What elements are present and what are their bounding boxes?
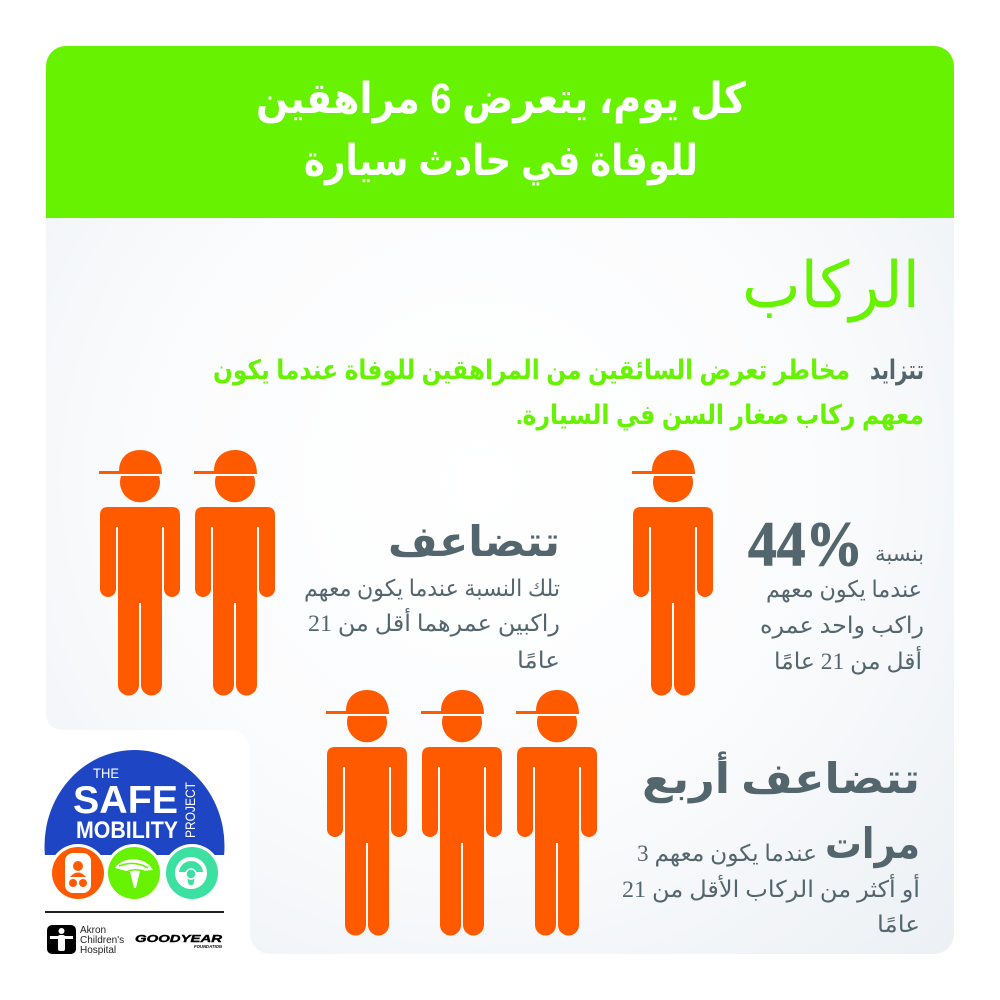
quadruples line 1: عندما يكون معهم 3	[637, 841, 817, 867]
logo: Akron Children's Hospital: Akron	[80, 925, 106, 936]
doubles heading: تتضاعف	[388, 520, 560, 566]
stat line 3: أقل من 21 عامًا	[774, 646, 922, 675]
doubles line 1: تلك النسبة عندما يكون معهم	[304, 576, 560, 602]
panel: main background	[46, 218, 954, 954]
logo text: PROJECT	[182, 782, 198, 838]
icon: helmet	[105, 844, 163, 902]
quadruples heading line 2: مرات	[825, 822, 920, 869]
logo dome	[44, 750, 224, 855]
doubles line 2: راكبين عمرهما أقل من 21	[308, 608, 560, 637]
logo text: MOBILITY	[76, 817, 178, 844]
stat: doubles	[304, 520, 560, 673]
stat line 2: راكب واحد عمره	[760, 613, 924, 639]
stat line 1: عندما يكون معهم	[766, 577, 922, 603]
logo: Akron Children's Hospital: Hospital	[80, 945, 116, 956]
icon: steering wheel	[163, 844, 221, 902]
stat value: 44%	[748, 508, 863, 579]
quadruples line 3: عامًا	[877, 912, 920, 937]
intro text	[213, 355, 924, 431]
intro line 1 dark word: تتزايد	[870, 355, 924, 386]
logo: Akron Children's Hospital	[47, 925, 124, 956]
logo text: SAFE	[73, 779, 178, 822]
figures: two passengers	[99, 450, 275, 696]
intro line 1 green: مخاطر تعرض السائقين من المراهقين للوفاة عندما يكون	[213, 355, 850, 386]
figure: one passenger	[632, 450, 713, 696]
logo: Safe Mobility Project	[44, 750, 224, 956]
stat: 44 percent	[748, 508, 924, 675]
title line 1: كل يوم، يتعرض 6 مراهقين	[256, 75, 746, 124]
intro line 2: معهم ركاب صغار السن في السيارة.	[516, 400, 924, 431]
logo text	[73, 765, 198, 844]
stat: quadruples	[622, 751, 920, 937]
stat prefix: بنسبة	[875, 541, 924, 566]
title line 2: للوفاة في حادث سيارة	[304, 137, 698, 186]
header banner	[46, 46, 954, 218]
quadruples line 2: أو أكثر من الركاب الأقل من 21	[622, 874, 920, 903]
logo: Goodyear Foundation: FOUNDATION	[194, 944, 223, 949]
heading: passengers: الركاب	[742, 249, 920, 323]
logo: Akron Children's Hospital: Children's	[80, 935, 124, 946]
logo divider	[45, 911, 224, 913]
logo: Goodyear Foundation	[135, 934, 223, 949]
logo: Goodyear Foundation: GOODYEAR	[135, 934, 223, 945]
icon: child seat	[49, 844, 107, 902]
logo text: THE	[93, 765, 119, 781]
quadruples heading line 1: تتضاعف أربع	[642, 751, 920, 804]
doubles line 3: عامًا	[517, 648, 560, 673]
figures: three passengers	[326, 690, 597, 936]
